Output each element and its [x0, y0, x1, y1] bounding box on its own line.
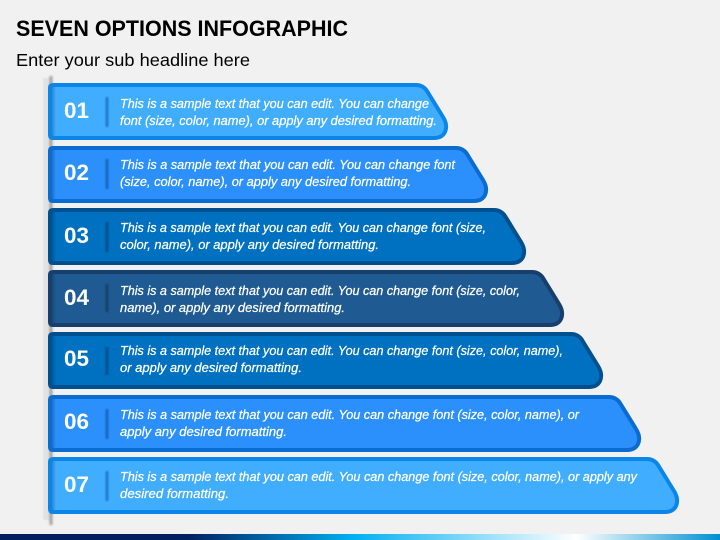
vertical shadow rail — [43, 76, 52, 525]
option 03: 03 — [64, 223, 89, 248]
option 04: name), or apply any desired formatting. — [120, 300, 345, 315]
option 05: or apply any desired formatting. — [120, 360, 302, 375]
option 01: font (size, color, name), or apply any desired formatting. — [120, 113, 437, 128]
option 01: This is a sample text that you can edit. You can change — [120, 96, 429, 111]
option 05: This is a sample text that you can edit. You can change font (size, color, name), — [120, 343, 563, 358]
option 01: 01 — [64, 98, 89, 123]
option 03 — [50, 210, 524, 263]
option 02: (size, color, name), or apply any desired formatting. — [120, 174, 411, 189]
option 04 — [50, 272, 562, 325]
option 01 — [50, 85, 446, 138]
option 06: This is a sample text that you can edit. You can change font (size, color, name), or — [120, 407, 580, 422]
option 07 — [50, 459, 677, 512]
option 06 — [50, 397, 639, 450]
option 05 — [50, 334, 601, 387]
option 04: This is a sample text that you can edit. You can change font (size, color, — [120, 283, 520, 298]
option 07: 07 — [64, 472, 89, 497]
title: SEVEN OPTIONS INFOGRAPHIC — [16, 16, 348, 41]
option 03: color, name), or apply any desired formatting. — [120, 237, 379, 252]
option 07: This is a sample text that you can edit. You can change font (size, color, name), or apply any — [120, 469, 639, 484]
option 03: This is a sample text that you can edit. You can change font (size, — [120, 220, 486, 235]
footer gradient bar — [0, 534, 720, 540]
option 07: desired formatting. — [120, 486, 229, 501]
option 06: apply any desired formatting. — [120, 424, 287, 439]
option 02: This is a sample text that you can edit. You can change font — [120, 157, 455, 172]
option 02: 02 — [64, 160, 89, 185]
option 05: 05 — [64, 346, 89, 371]
subtitle: Enter your sub headline here — [16, 50, 250, 70]
option 06: 06 — [64, 409, 89, 434]
option 02 — [50, 148, 486, 201]
option 04: 04 — [64, 285, 90, 310]
